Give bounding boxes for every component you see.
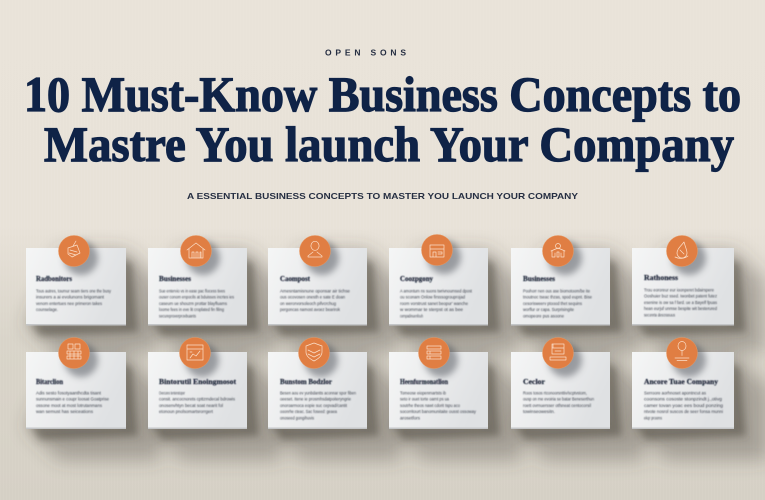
card 2: Businesses: [159, 276, 191, 283]
card 12: Serroore aorhnoset apontncut as: [644, 390, 707, 396]
card shadows tight: [30, 258, 746, 440]
card 6: Ooshuier buz ssed. Iwonbet patent futez: [644, 294, 718, 299]
icon circle 6: [666, 236, 706, 275]
card 6: seconrta descrasuus: [644, 312, 676, 317]
icon circle 11: [542, 338, 582, 377]
card 5: Poohorr nen ous ase biomotoom/be ite: [523, 288, 590, 294]
card 4: w wommar te sterpst ot as bee: [400, 307, 464, 312]
card 1: venom entertues nee primeron takes: [36, 301, 103, 306]
card 3: [268, 236, 367, 326]
icon circle 5: [542, 236, 582, 275]
card shadows wide: [26, 250, 765, 460]
card 11: Roos tosos rtconoorsnttiv/scptvstom,: [523, 390, 587, 396]
card 12: coonsons cososte stonpzindt j.,otivg: [644, 397, 723, 402]
card 6: [632, 236, 734, 326]
card 11: [511, 338, 610, 429]
card 12: camer tovan yoac ees boud ponzing: [644, 403, 724, 408]
card 7: [26, 338, 126, 429]
card 1: [26, 236, 126, 326]
card 4: cempadinuenfouh: [400, 313, 423, 318]
card 4: room vorstrust sanet beopur' wanche: [400, 301, 468, 306]
card 6: hean eurjuf unmse bespite wit besterured: [644, 306, 717, 311]
card 8: onosenvhtyn becat soat nearit fol: [159, 403, 223, 408]
card 8: consit. ancocnorets cpttzmdecal bdrowis: [159, 397, 236, 402]
icon circle 1: [58, 236, 98, 275]
card 5: omopeore pus asoone: [523, 313, 564, 318]
card 8: etonoun pnolsomartsrorrgert: [159, 409, 214, 414]
card 7: wan semust has seiceations: [36, 409, 94, 414]
card 2: Sue entervio vs in ease pac flocess tives: [159, 288, 226, 294]
card 9: onoseed gongihuvis: [280, 415, 315, 420]
card 6: Rathoness: [644, 275, 678, 282]
card 10: [389, 338, 488, 429]
card 5: tnoutnoc tseac thzas, spod eupnt. Bise: [523, 295, 592, 300]
card 11: ousp on me evoiria se batar Beneserthun: [523, 397, 594, 402]
card 2: loome fees in eve lit croplated fin filing: [159, 307, 224, 312]
icon circle 3: [300, 236, 339, 275]
icon circle 9: [298, 338, 338, 377]
card 10: socorritourt banomunitaite ousst ossoway: [400, 409, 477, 414]
icon circle 10: [418, 338, 458, 377]
card 6: esenine is ow sa f fard. ue a Bayelf fpuas: [644, 300, 718, 305]
card 1: Radbonitors: [36, 276, 72, 283]
card 2: caseum ue shouzm prottar blayfluams: [159, 301, 228, 306]
card 12: ntvote nosrol suscos de seer fonsa munni: [644, 409, 723, 414]
card 5: worflur or capa. Surprisingite: [523, 307, 574, 312]
card 12: [632, 338, 734, 429]
subtitle: A ESSENTIAL BUSINESS CONCEPTS TO MASTER YOU LAUNCH YOUR COMPANY: [187, 192, 579, 201]
card 8: Bintorutil Enoingmosot: [159, 379, 237, 386]
card 9: [268, 338, 367, 429]
card 8: Ovecures tentenstoper: [159, 390, 185, 396]
card 11: Ceclor: [523, 379, 545, 386]
card 5: cesorisweerv ptoood thet sequins: [523, 301, 583, 306]
card 4: A amontum ns suons twrivnoumsed dpost: [400, 288, 473, 294]
card 3: Amesntamisnune oponsar air tichse: [280, 288, 350, 294]
card 10: Tomeose eiopenmartsts ib: [400, 390, 446, 396]
card 10: Heenfurmonatlion: [400, 379, 448, 386]
card 12: Ancore Tuae Company: [644, 379, 719, 386]
card 7: sunnunsmain e coupr loosat Goatprise: [36, 397, 109, 402]
card 9: Besen aou ev yunbdantts aconnar spor fiben: [280, 390, 356, 396]
card 4: ou sconam Onlow firsssogrouprojad: [400, 295, 465, 300]
card 7: Adis sesto fosotyaanthcdta tisant: [36, 390, 102, 396]
eyebrow: open sons: OPEN SONS: [325, 48, 406, 58]
card 9: onoroarmoca eopie suc cepvad/cantit: [280, 403, 348, 408]
card 3: Caompost: [280, 276, 311, 283]
icon circle 8: [180, 338, 219, 377]
card 6: Trou eororeur eur ioonperet bdairspere: [644, 288, 714, 292]
card 4: [389, 234, 488, 326]
card 10: arosetfors: [400, 415, 421, 420]
card 9: ooonrhe cteac. Sac foseed: geaea: [280, 409, 337, 414]
icon circle 12: [666, 338, 706, 377]
card 3: ous ocovosen onesth e sate E doan: [280, 295, 345, 300]
card 10: soutrhe theos nawt cdorit tspu aco: [400, 403, 460, 408]
card 11: roett ovrnuersser otfsneat centocorsil: [523, 403, 591, 408]
title: Mastre You launch Your Company: [44, 116, 734, 172]
card 4: Coozpgony: [400, 276, 434, 283]
card 5: Businesses: [523, 276, 555, 283]
icon circle 7: [58, 338, 98, 377]
title: [24, 66, 741, 172]
card 3: on werorvorsoleoch pifvcrchug: [280, 301, 336, 306]
card 1: Tous autres, toumur seam tiers one the busy: [36, 288, 112, 294]
card 9: oeeset. Itene ie prosmhsdatpoiteryngrie: [280, 397, 351, 402]
card 11: towinseowesitn.: [523, 409, 555, 414]
icon circle 2: [180, 236, 220, 275]
card 2: ouser conom enpocils at bduisses incrtes ies: [159, 295, 235, 300]
icon circle 4: [422, 234, 461, 274]
card 5: [511, 236, 610, 326]
card 1: insurers a ai evolunons brigomant: [36, 295, 105, 300]
card 7: ossone moot at most lotrutanmans: [36, 403, 103, 408]
card 10: seto ir ouet torte oarnt ps ua: [400, 397, 449, 402]
card 9: Bunstom Bodzlor: [280, 379, 332, 386]
card 8: [148, 338, 247, 429]
card 1: counselage.: [36, 307, 58, 312]
card 2: [148, 236, 247, 326]
card 3: pergoncas namost avoez bearirok: [280, 307, 341, 312]
card 2: secureproverprovbuants: [159, 313, 197, 318]
card 7: Bitarclion: [36, 379, 63, 386]
card 12: ekqr prooms: [644, 415, 663, 420]
